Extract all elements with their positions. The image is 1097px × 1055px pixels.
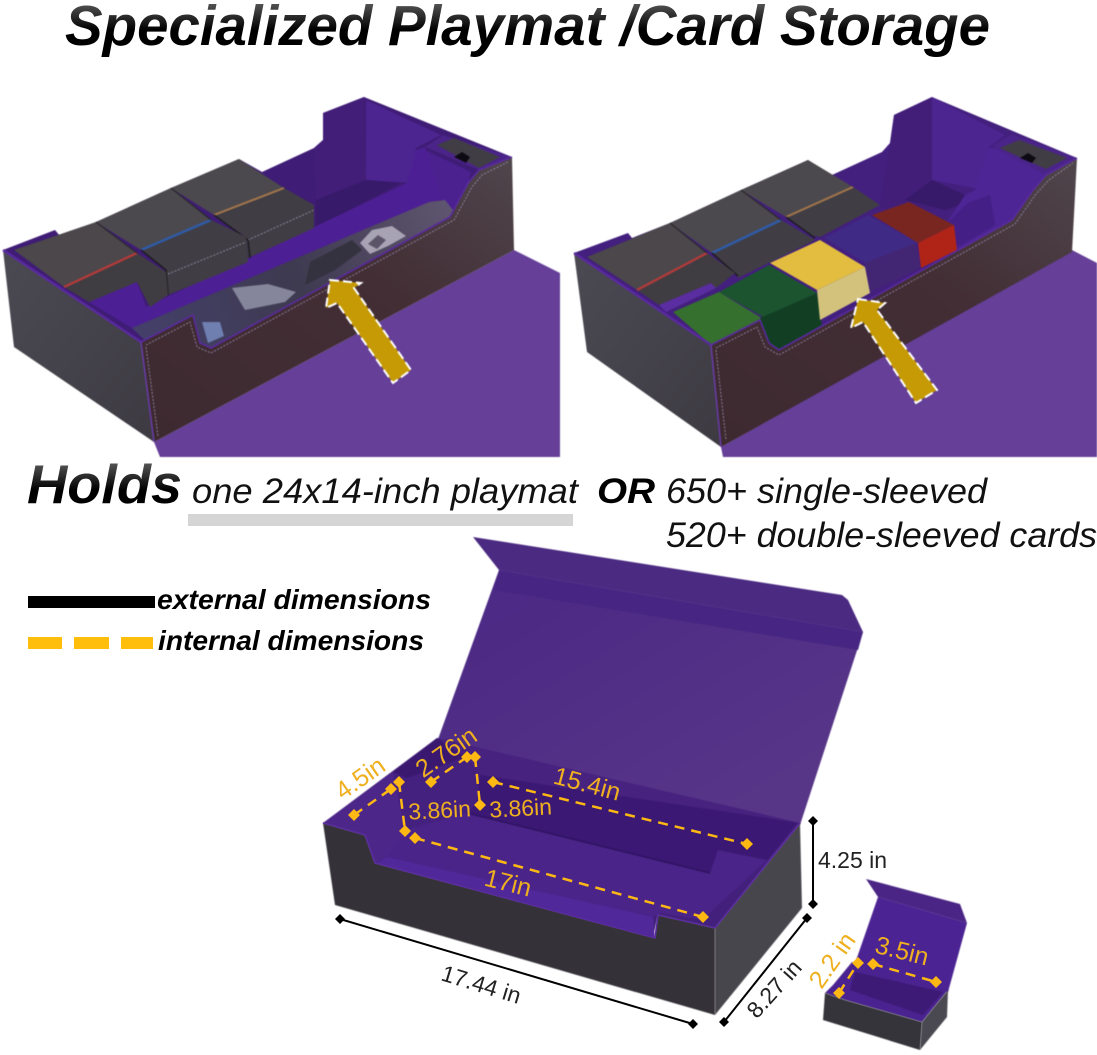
box interior [574,97,1077,350]
label 8.27 in: 8.27 in [741,954,807,1023]
red cards [872,202,957,268]
external dimensions label: external dimensions [157,584,431,615]
small box left face [823,993,922,1050]
playmat capacity: one 24x14-inch playmat [192,472,579,511]
open lid [437,537,863,825]
small box interior [825,962,948,1022]
deck box 1 (red) [587,223,735,305]
small corner tray with lid [411,135,512,213]
panel: box holding a playmat [3,97,560,457]
light green cards [673,292,765,345]
gray underline bar [188,514,573,526]
front face [711,158,1077,447]
rolled playmat [132,200,456,352]
box interior [3,97,512,348]
small box dimension lines [833,957,942,999]
external dimensions key [28,596,155,608]
interior [323,738,800,938]
label 4.5in: 4.5in [330,751,391,805]
internal dimensions label: internal dimensions [158,625,424,656]
double-sleeved capacity: 520+ double-sleeved cards [666,516,1097,555]
label 4.25 in: 4.25 in [818,847,887,873]
external dimension lines [335,816,818,1029]
purple open lid mat [154,250,560,457]
right side face [715,823,802,1015]
legend [28,584,431,656]
label 2.2 in: 2.2 in [803,927,861,993]
panel: large box dimensions [323,537,887,1029]
short divider [659,283,716,312]
deck box 2 (blue) [96,188,248,295]
label 17in: 17in [482,864,534,903]
label 3.5in: 3.5in [872,931,932,971]
panel: small box dimensions [803,879,967,1050]
arrow [326,280,411,383]
left side face [323,823,715,1015]
purple open lid mat [721,250,1097,457]
indigo cards [824,215,920,292]
deck box 3 (orange) [171,159,314,258]
dark green cards [719,265,822,352]
Holds: Holds [27,453,182,515]
single-sleeved capacity: 650+ single-sleeved [666,472,989,511]
deck box 3 (orange) [741,160,880,238]
deck box 2 (blue) [670,190,815,278]
internal dimensions key [28,637,153,649]
back compartment walls [880,97,1046,250]
arrow [851,299,937,403]
label 17.44 in: 17.44 in [438,960,524,1009]
internal dimension lines [348,751,753,923]
label 3.86in left: 3.86in [408,795,472,825]
yellow cards [770,240,870,320]
divider wall [89,147,441,328]
label 15.4in: 15.4in [551,762,624,807]
small box right face [920,990,948,1050]
front face [141,157,514,442]
small corner tray with lid [992,134,1077,175]
deck box 1 (red) [14,222,168,307]
left side face [574,253,721,447]
back compartment walls [314,97,441,228]
capacity text [27,453,1097,555]
label 3.86in right: 3.86in [489,793,553,823]
left side face [3,250,154,442]
panel: box holding cards [574,97,1097,457]
small box lid [852,879,967,992]
OR: OR [597,472,656,511]
label 2.76in: 2.76in [410,721,482,783]
